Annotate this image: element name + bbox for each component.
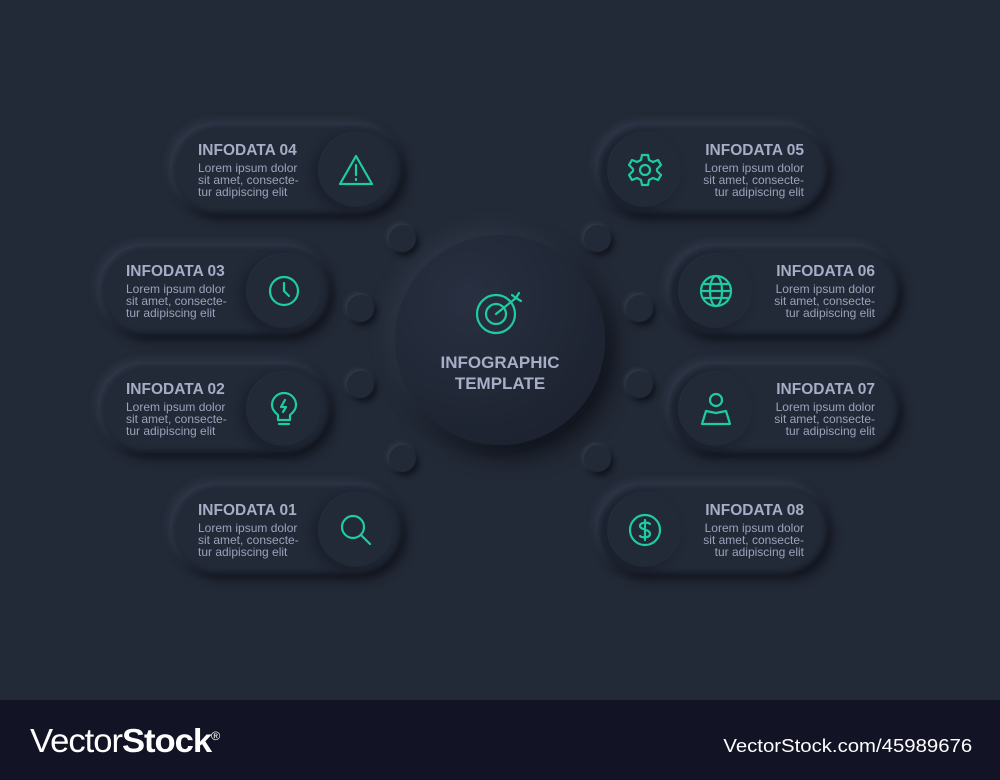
panel: infodata 01: sit amet, consecte-: [198, 533, 299, 547]
panel: infodata 06: Lorem ipsum dolor: [776, 282, 875, 296]
panel: infodata 06: [669, 246, 899, 335]
panel: infodata 03: sit amet, consecte-: [126, 294, 227, 308]
center circle: [395, 235, 605, 445]
panel: infodata 01: tur adipiscing elit: [198, 545, 287, 559]
panel: infodata 01: INFODATA 01: [198, 502, 297, 519]
icon: dollar: [607, 492, 682, 567]
icon: warning: [318, 132, 393, 207]
footer logo: VectorStock®: [30, 722, 219, 759]
center title: INFOGRAPHIC: [440, 353, 560, 372]
icon: gear: [607, 132, 682, 207]
panel: infodata 02: [100, 364, 330, 453]
panel: infodata 04: Lorem ipsum dolor: [198, 161, 297, 175]
panel: infodata 06: tur adipiscing elit: [786, 306, 875, 320]
panel: infodata 04: sit amet, consecte-: [198, 173, 299, 187]
footer: [0, 700, 1000, 780]
panel: infodata 07: sit amet, consecte-: [774, 412, 875, 426]
panel: infodata 07: INFODATA 07: [776, 381, 875, 398]
panel: infodata 02: Lorem ipsum dolor: [126, 400, 225, 414]
panel: infodata 05: INFODATA 05: [705, 142, 804, 159]
panel: infodata 06: INFODATA 06: [776, 263, 875, 280]
panel: infodata 08: tur adipiscing elit: [715, 545, 804, 559]
icon: search: [318, 492, 393, 567]
panel: infodata 06: sit amet, consecte-: [774, 294, 875, 308]
panel: infodata 03: [100, 246, 330, 335]
panel: infodata 07: Lorem ipsum dolor: [776, 400, 875, 414]
panel: infodata 03: tur adipiscing elit: [126, 306, 215, 320]
panel: infodata 02: INFODATA 02: [126, 381, 225, 398]
panel: infodata 05: Lorem ipsum dolor: [705, 161, 804, 175]
footer url: VectorStock.com/45989676: [723, 736, 972, 756]
icon: target: [476, 292, 522, 334]
icon: lightbulb: [246, 371, 321, 446]
panel: infodata 08: Lorem ipsum dolor: [705, 521, 804, 535]
panel: infodata 05: tur adipiscing elit: [715, 185, 804, 199]
panel: infodata 03: INFODATA 03: [126, 263, 225, 280]
panel: infodata 01: [172, 485, 402, 574]
panel: infodata 05: [598, 125, 828, 214]
icon: person on map: [678, 371, 753, 446]
panel: infodata 07: [669, 364, 899, 453]
panel: infodata 03: Lorem ipsum dolor: [126, 282, 225, 296]
panel: infodata 04: tur adipiscing elit: [198, 185, 287, 199]
panel: infodata 05: sit amet, consecte-: [703, 173, 804, 187]
decorative knobs: [345, 160, 732, 546]
panel: infodata 02: sit amet, consecte-: [126, 412, 227, 426]
panel: infodata 04: [172, 125, 402, 214]
panel: infodata 04: INFODATA 04: [198, 142, 297, 159]
panel: infodata 08: [598, 485, 828, 574]
panel: infodata 08: INFODATA 08: [705, 502, 804, 519]
icon: globe: [678, 253, 753, 328]
center title: [440, 353, 560, 393]
panel: infodata 07: tur adipiscing elit: [786, 424, 875, 438]
panel: infodata 08: sit amet, consecte-: [703, 533, 804, 547]
panel: infodata 01: Lorem ipsum dolor: [198, 521, 297, 535]
center title: TEMPLATE: [455, 374, 545, 393]
icon: clock: [246, 253, 321, 328]
panel: infodata 02: tur adipiscing elit: [126, 424, 215, 438]
